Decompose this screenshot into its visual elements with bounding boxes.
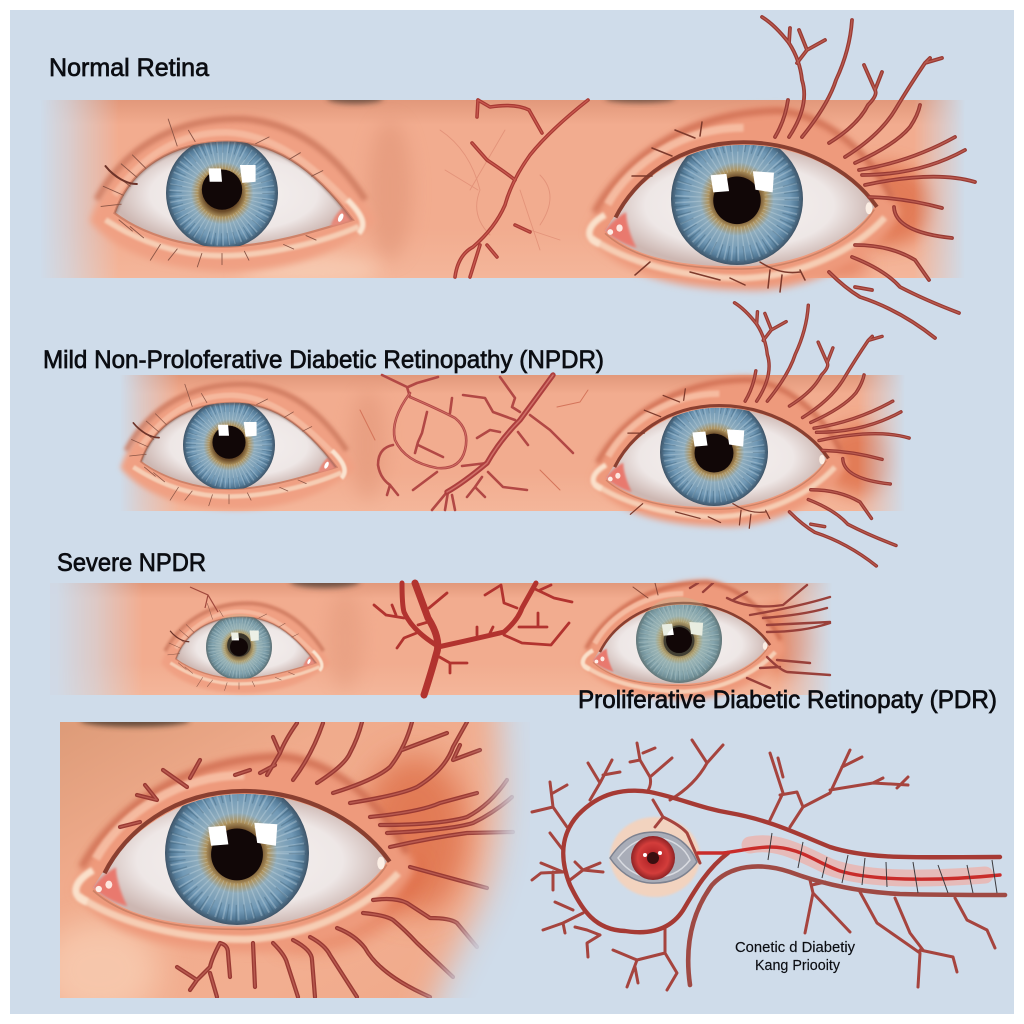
heading: Mild NPDR: Mild Non-Proloferative Diabetic Retinopathy (NPDR) xyxy=(43,346,604,374)
measurement ticks xyxy=(768,833,997,893)
central vessels strip 3 xyxy=(374,583,572,695)
heading: Severe NPDR: Severe NPDR xyxy=(57,549,206,577)
panel: close-up eye with vessels xyxy=(60,722,522,998)
central vessel network strip 2 xyxy=(360,375,588,510)
left eye strip 3 xyxy=(161,601,330,693)
panel: severe NPDR eye strip xyxy=(50,574,840,700)
heading: Normal Retina: Normal Retina xyxy=(49,54,209,82)
right iris tint strip 3 xyxy=(651,612,707,668)
vessels around right eye strip 2 xyxy=(628,303,909,566)
panel: vessel network diagram xyxy=(532,740,1005,990)
skin strip 3 xyxy=(50,574,840,695)
skin strip 2 xyxy=(110,375,910,511)
right eye strip 1 xyxy=(587,107,901,290)
vessels around right eye strip 1 xyxy=(632,17,975,338)
left iris tint strip 3 xyxy=(218,626,260,668)
close-up eye xyxy=(73,752,416,953)
vessel branches xyxy=(532,740,995,990)
central vessel strip 1 xyxy=(440,100,588,277)
right eye strip 2 xyxy=(591,376,848,527)
main vessels xyxy=(563,791,1005,985)
small vessels above left eye strip 3 xyxy=(190,587,218,612)
left eye strip 1 xyxy=(90,114,377,272)
skin strip 4 xyxy=(60,722,522,998)
vessels around right eye strip 3 xyxy=(633,583,830,688)
diagram caption: Conetic d Diabetiy xyxy=(735,940,856,956)
mini eye xyxy=(610,817,700,897)
heading: Proliferative Diabetic Retinopathy: Proliferative Diabetic Retinopaty (PDR) xyxy=(578,686,997,714)
right eye strip 3 xyxy=(581,580,786,700)
panel: normal retina eye strip xyxy=(40,17,975,338)
skin strip 1 xyxy=(40,92,965,286)
close-up vessels xyxy=(120,722,513,997)
diagram caption second line: Kang Priooity xyxy=(755,958,841,974)
panel: mild NPDR eye strip xyxy=(110,303,910,566)
pale vessel band xyxy=(750,844,985,878)
left eye strip 2 xyxy=(120,381,356,510)
